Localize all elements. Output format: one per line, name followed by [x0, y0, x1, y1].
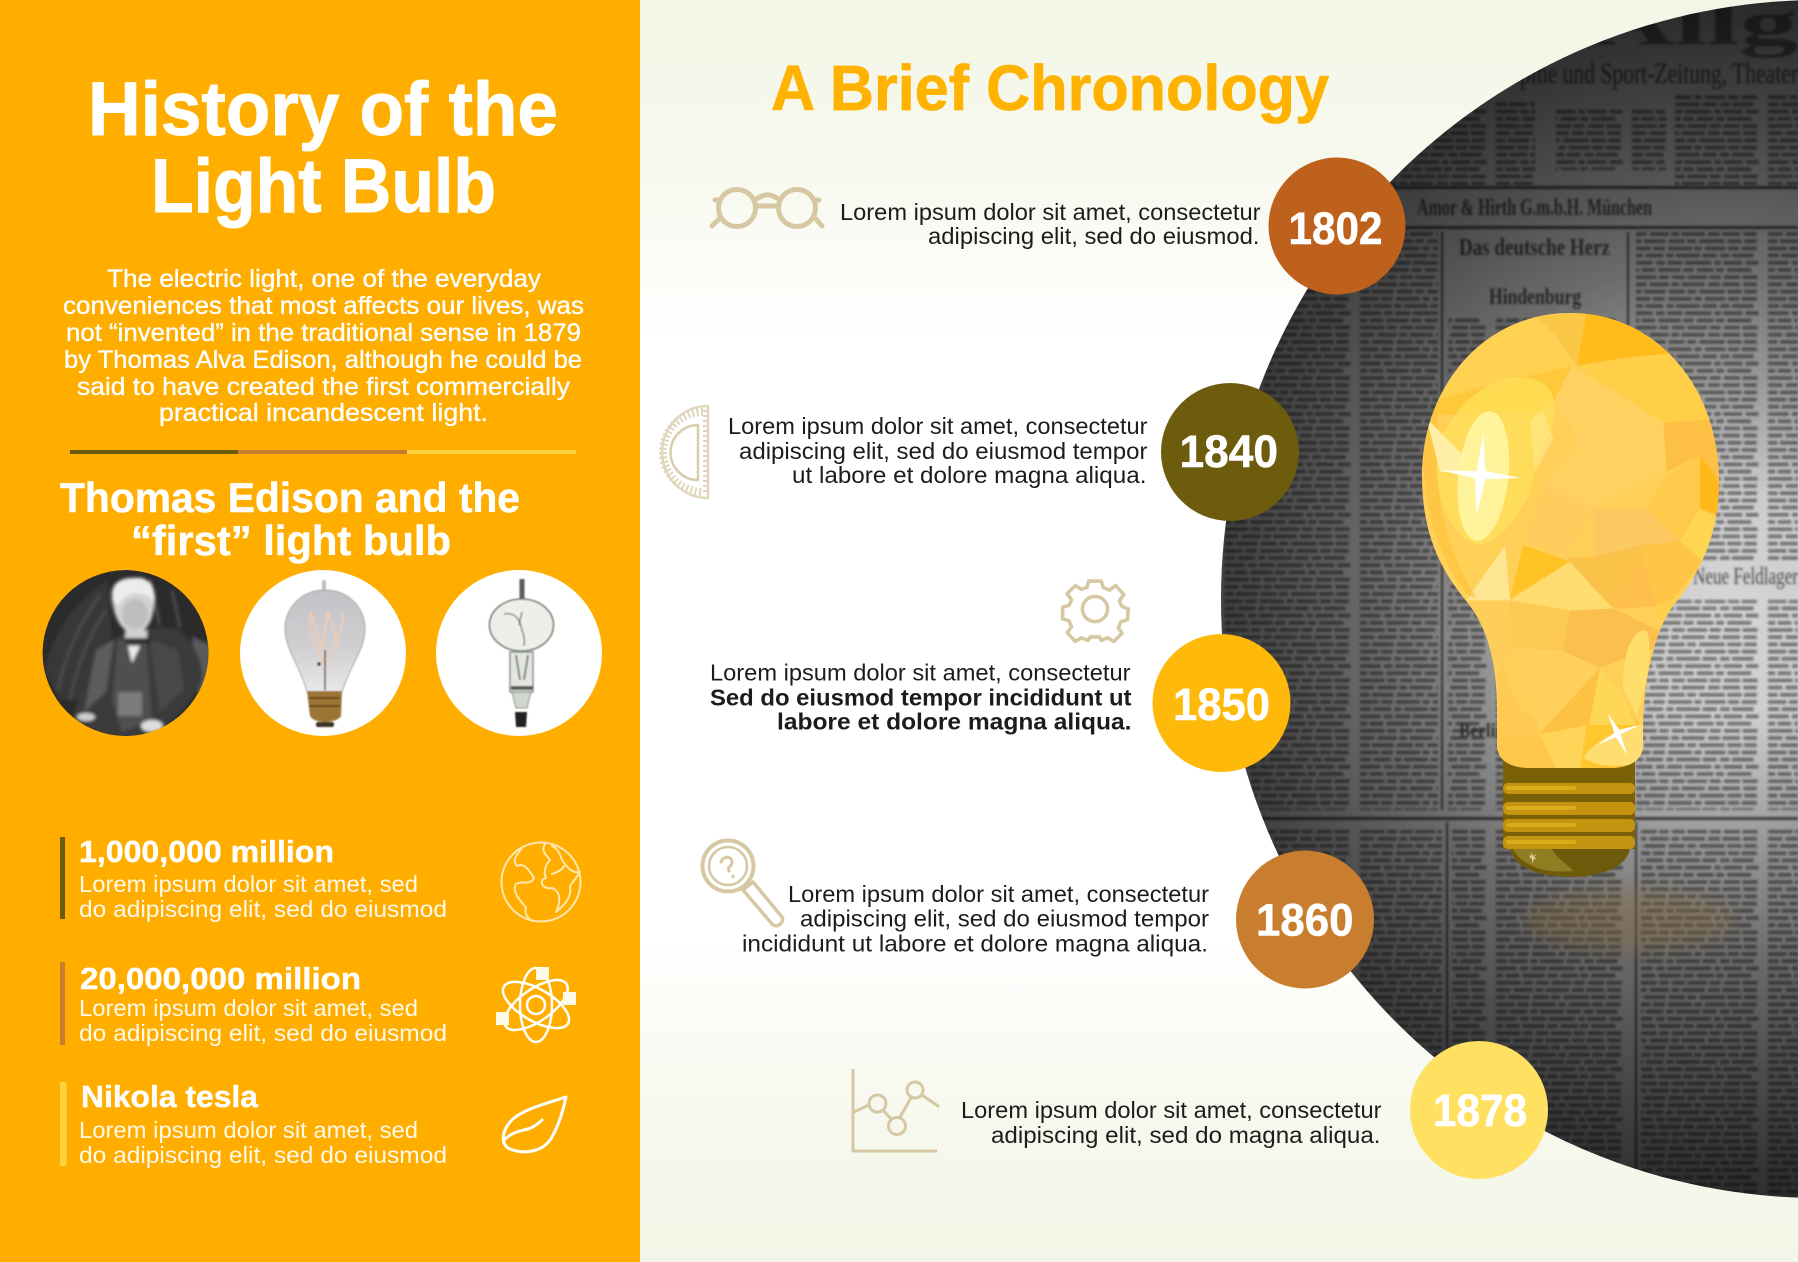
year badge 1860: 1860 [1256, 894, 1354, 946]
intro paragraph: not “invented” in the traditional sense in 1879 [66, 319, 581, 347]
stat: 20,000,000 million [60, 961, 447, 1046]
stat: 1,000,000 million: 1,000,000 million [79, 834, 334, 869]
year badge 1802: 1802 [1288, 203, 1382, 254]
newspaper photo background [1200, 0, 1798, 1262]
year badge 1850 [1152, 634, 1290, 772]
stat: 20,000,000 million: do adipiscing elit, sed do eiusmod [79, 1020, 447, 1046]
description 1802 [840, 199, 1261, 249]
left orange panel [0, 0, 640, 1262]
icon: protractor [662, 406, 708, 498]
description 1840 [728, 413, 1148, 488]
intro paragraph [63, 265, 584, 427]
year badge 1878 [1410, 1041, 1548, 1179]
description 1860: incididunt ut labore et dolore magna aliqua. [742, 930, 1208, 956]
year badge 1840 [1161, 383, 1299, 521]
description 1840: Lorem ipsum dolor sit amet, consectetur [728, 413, 1148, 439]
year badge 1860 [1236, 850, 1374, 988]
photo: early Edison bulb [436, 570, 602, 736]
right panel background [640, 0, 1798, 1262]
photo: Thomas Edison portrait [42, 570, 210, 738]
description 1850: Sed do eiusmod tempor incididunt ut [710, 684, 1132, 710]
chart heading: A Brief Chronology [771, 52, 1329, 124]
icon: globe [502, 842, 580, 922]
icon: atom [496, 967, 576, 1042]
description 1860: adipiscing elit, sed do eiusmod tempor [800, 906, 1209, 932]
timeline entry 1860 [702, 840, 1374, 988]
newspaper photo background: Berlin [1459, 720, 1505, 742]
description 1840: adipiscing elit, sed do eiusmod tempor [739, 438, 1148, 464]
title: History of the [88, 67, 558, 152]
sub heading [60, 474, 520, 564]
description 1860 [742, 881, 1209, 956]
description 1850 [710, 660, 1132, 734]
sub heading: Thomas Edison and the [60, 474, 520, 521]
title: Light Bulb [151, 144, 496, 229]
stat: Nikola tesla: Nikola tesla [81, 1079, 259, 1114]
icon: glasses [712, 190, 822, 226]
newspaper photo background: Das deutsche Herz [1459, 235, 1610, 261]
stat: 20,000,000 million: Lorem ipsum dolor sit amet, sed [79, 995, 418, 1021]
photo: carbon filament bulb [240, 570, 406, 736]
description 1878: adipiscing elit, sed do magna aliqua. [991, 1122, 1380, 1148]
intro paragraph: by Thomas Alva Edison, although he could be [64, 346, 582, 374]
newspaper circle with bulb [1200, 0, 1798, 1262]
description 1850: labore et dolore magna aliqua. [777, 708, 1132, 734]
newspaper photo background: Hindenburg [1489, 284, 1581, 309]
description 1860: Lorem ipsum dolor sit amet, consectetur [788, 881, 1209, 907]
intro paragraph: conveniences that most affects our lives, was [63, 292, 584, 320]
year badge 1802 [1268, 158, 1406, 294]
timeline entry 1802 [712, 158, 1406, 294]
newspaper photo background: Amor & Hirth G.m.b.H. München [1417, 195, 1652, 221]
year badge 1878: 1878 [1433, 1085, 1527, 1136]
stat: Nikola tesla: do adipiscing elit, sed do eiusmod [79, 1142, 447, 1168]
description 1802: adipiscing elit, sed do eiusmod. [928, 223, 1260, 249]
icon: gear [1063, 581, 1128, 641]
stat: Nikola tesla [60, 1079, 447, 1168]
description 1840: ut labore et dolore magna aliqua. [792, 462, 1146, 488]
stat: 1,000,000 million: do adipiscing elit, sed do eiusmod [79, 896, 447, 922]
stat: 20,000,000 million: 20,000,000 million [80, 961, 361, 996]
light bulb screw base [1503, 759, 1635, 877]
icon: magnifying glass [702, 840, 783, 926]
sub heading: “first” light bulb [131, 517, 451, 564]
timeline entry 1878 [853, 1041, 1548, 1179]
stat: 1,000,000 million: Lorem ipsum dolor sit amet, sed [79, 871, 418, 897]
description 1802: Lorem ipsum dolor sit amet, consectetur [840, 199, 1261, 225]
description 1878 [961, 1097, 1382, 1148]
icon: line chart [853, 1069, 938, 1151]
year badge 1850: 1850 [1173, 679, 1270, 730]
icon: leaf [503, 1097, 566, 1152]
bulb shadow [1525, 890, 1735, 950]
timeline entry 1850 [710, 581, 1290, 772]
stat: 1,000,000 million [60, 834, 447, 922]
description 1850: Lorem ipsum dolor sit amet, consectetur [710, 660, 1131, 686]
timeline entry 1840 [662, 383, 1299, 521]
intro paragraph: The electric light, one of the everyday [107, 265, 542, 293]
year badge 1840: 1840 [1180, 426, 1278, 477]
stat: Nikola tesla: Lorem ipsum dolor sit amet, sed [79, 1117, 418, 1143]
title [88, 67, 558, 229]
intro paragraph: practical incandescent light. [159, 399, 488, 427]
light bulb glass [1420, 310, 1722, 772]
tricolour divider [70, 450, 576, 454]
description 1878: Lorem ipsum dolor sit amet, consectetur [961, 1097, 1382, 1123]
intro paragraph: said to have created the first commercially [77, 373, 571, 401]
